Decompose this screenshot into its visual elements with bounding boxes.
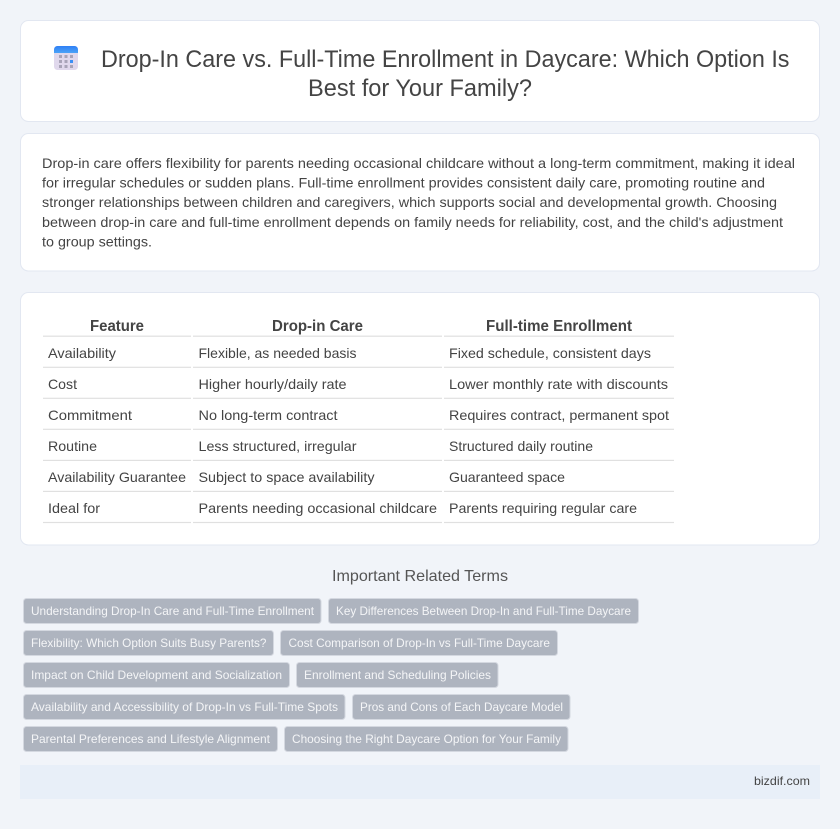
table row: ideal for xyxy=(48,500,637,516)
text block: summary: Drop-in care offers flexibility for parents needing occasional childcare without a long-term commitment, making it ideal xyxy=(42,155,795,171)
table row: commitment: No long-term contract xyxy=(198,407,338,423)
table row: availability guarantee: Guaranteed space xyxy=(449,469,565,485)
table row: availability: Availability xyxy=(48,345,116,361)
table row: cost: Higher hourly/daily rate xyxy=(198,376,347,392)
table row: cost xyxy=(48,376,668,392)
panel: related term tags xyxy=(24,598,638,752)
title xyxy=(101,46,790,102)
tag xyxy=(296,662,498,688)
tag xyxy=(24,662,290,688)
footer xyxy=(20,765,820,799)
table row: availability guarantee xyxy=(48,469,565,485)
tag: Parental Preferences and Lifestyle Alignment xyxy=(31,732,271,746)
text block: summary xyxy=(42,155,795,249)
table row: routine: Routine xyxy=(48,438,97,454)
tag xyxy=(24,694,345,720)
tag: Key Differences Between Drop-In and Full-Time Daycare xyxy=(336,604,631,618)
tag xyxy=(352,694,570,720)
table header xyxy=(90,318,633,335)
tag xyxy=(24,598,321,624)
table row: ideal for: Parents needing occasional childcare xyxy=(198,500,437,516)
table header: Drop-in Care xyxy=(272,318,363,335)
tag: Flexibility: Which Option Suits Busy Parents? xyxy=(31,636,267,650)
table row: availability guarantee: Subject to space availability xyxy=(198,469,374,485)
tag: Pros and Cons of Each Daycare Model xyxy=(360,700,563,714)
table row: commitment: Commitment xyxy=(48,407,132,423)
text block: summary: stronger relationships between children and caregivers, which supports social and developmental growth. Choosing xyxy=(42,194,777,210)
tag xyxy=(328,598,638,624)
table row: availability xyxy=(48,345,651,361)
table header: Full-time Enrollment xyxy=(486,318,633,335)
table row: routine: Structured daily routine xyxy=(449,438,593,454)
table row: routine xyxy=(48,438,593,454)
table row: availability: Fixed schedule, consistent days xyxy=(449,345,651,361)
text block: summary: between drop-in care and full-time enrollment depends on family needs for reliability, cost, and the child's adjustment xyxy=(42,214,783,230)
table row: commitment xyxy=(48,407,669,423)
table row: routine: Less structured, irregular xyxy=(198,438,357,454)
tag: Understanding Drop-In Care and Full-Time Enrollment xyxy=(31,604,315,618)
icon: calendar xyxy=(54,46,78,70)
footer: bizdif.com xyxy=(754,774,810,788)
table header: Feature xyxy=(90,318,144,335)
tag xyxy=(280,630,558,656)
table row: availability: Flexible, as needed basis xyxy=(198,345,356,361)
table row: ideal for: Parents requiring regular care xyxy=(449,500,637,516)
title: Best for Your Family? xyxy=(308,75,532,102)
tag: Availability and Accessibility of Drop-In vs Full-Time Spots xyxy=(31,700,338,714)
tag xyxy=(284,726,568,752)
table row: availability guarantee: Availability Guarantee xyxy=(48,469,186,485)
tag: Cost Comparison of Drop-In vs Full-Time Daycare xyxy=(288,636,550,650)
title: Drop-In Care vs. Full-Time Enrollment in Daycare: Which Option Is xyxy=(101,46,790,73)
tag xyxy=(24,726,278,752)
table row: commitment: Requires contract, permanent spot xyxy=(449,407,669,423)
table row: cost: Cost xyxy=(48,376,77,392)
tag: Enrollment and Scheduling Policies xyxy=(304,668,491,682)
text block: summary: for irregular schedules or sudden plans. Full-time enrollment provides consistent daily care, promoting routine and xyxy=(42,175,765,191)
heading: important related terms: Important Related Terms xyxy=(332,568,508,585)
table row: ideal for: Ideal for xyxy=(48,500,100,516)
tag xyxy=(24,630,274,656)
panel: header xyxy=(20,20,820,122)
panel: introduction text xyxy=(20,134,820,271)
text block: summary: to group settings. xyxy=(42,233,152,249)
tag: Impact on Child Development and Socialization xyxy=(31,668,282,682)
panel: comparison table xyxy=(20,292,820,545)
table row: cost: Lower monthly rate with discounts xyxy=(449,376,668,392)
tag: Choosing the Right Daycare Option for Your Family xyxy=(292,732,561,746)
